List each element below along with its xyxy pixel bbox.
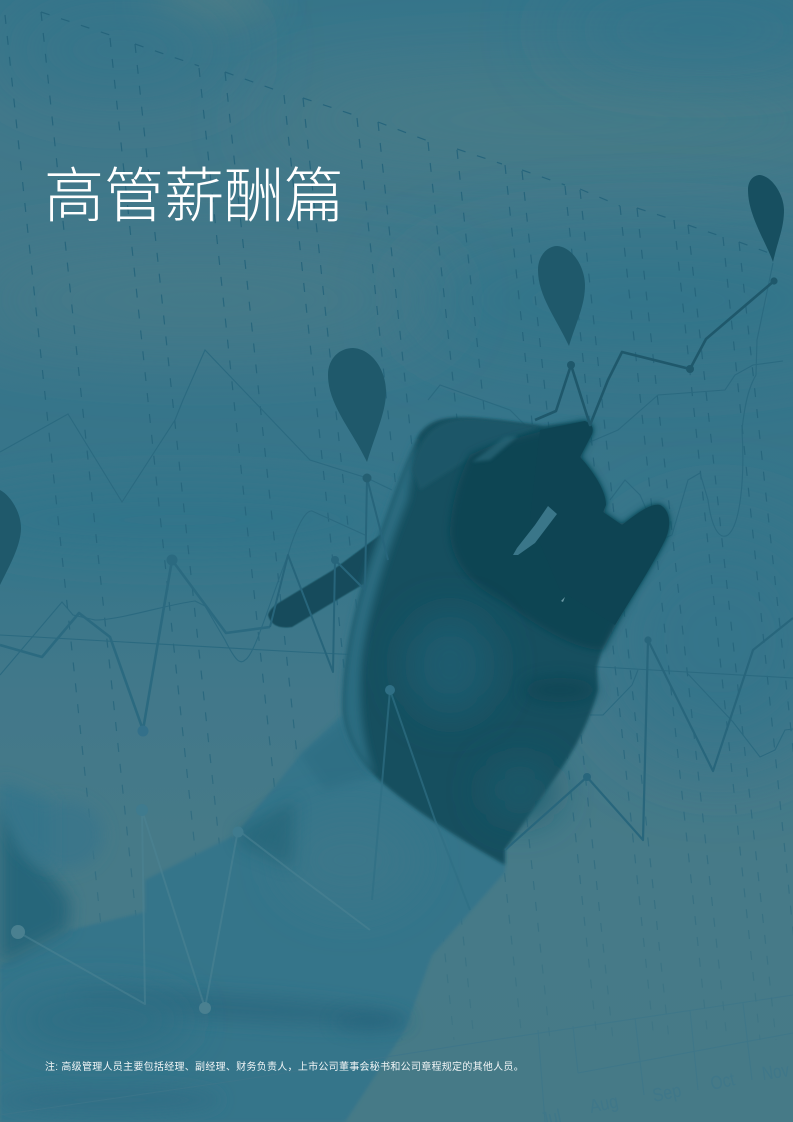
- axis month labels: Nov: [761, 1059, 791, 1084]
- background tonal bands: [0, 0, 793, 760]
- lit hand edge: [343, 436, 418, 775]
- pin 1: [328, 348, 386, 462]
- axis month labels: Sep: [650, 1079, 683, 1106]
- thin chart curves: [0, 263, 793, 1055]
- knuckles top: [412, 418, 540, 490]
- sleeve series: [18, 810, 370, 1008]
- centre series: [270, 478, 367, 672]
- pin 4 cropped: [0, 490, 21, 585]
- axis month labels: [538, 1059, 791, 1122]
- gap between fingers: [513, 506, 557, 555]
- axis month labels: Oct: [708, 1068, 737, 1094]
- title: 高管薪酬篇: [44, 163, 344, 230]
- pen body: [268, 480, 420, 628]
- axis month labels: Aug: [587, 1090, 620, 1117]
- palm series: [372, 690, 470, 910]
- pin 3: [748, 175, 784, 262]
- upper right series: [535, 281, 774, 425]
- palm highlight: [404, 613, 496, 717]
- other hand shadow at left edge: [0, 780, 103, 965]
- fingers darkest: [450, 421, 669, 650]
- pin 2: [538, 246, 585, 346]
- hand mass: [343, 418, 669, 865]
- hand holding pen: [268, 418, 669, 865]
- crisp finger outline: [530, 421, 669, 625]
- sleeve and shirt: [0, 715, 505, 1122]
- map pins: [0, 175, 784, 585]
- footnote: 注: 高级管理人员主要包括经理、副经理、财务负责人，上市公司董事会秘书和公司章程规定的其他人员。: [45, 1062, 524, 1073]
- line chart thick strokes: [0, 281, 793, 1008]
- chart axis: [0, 995, 793, 1122]
- right series: [505, 618, 793, 850]
- chart data markers: [11, 277, 778, 1014]
- finger highlight: [472, 436, 518, 462]
- left series: [0, 560, 270, 730]
